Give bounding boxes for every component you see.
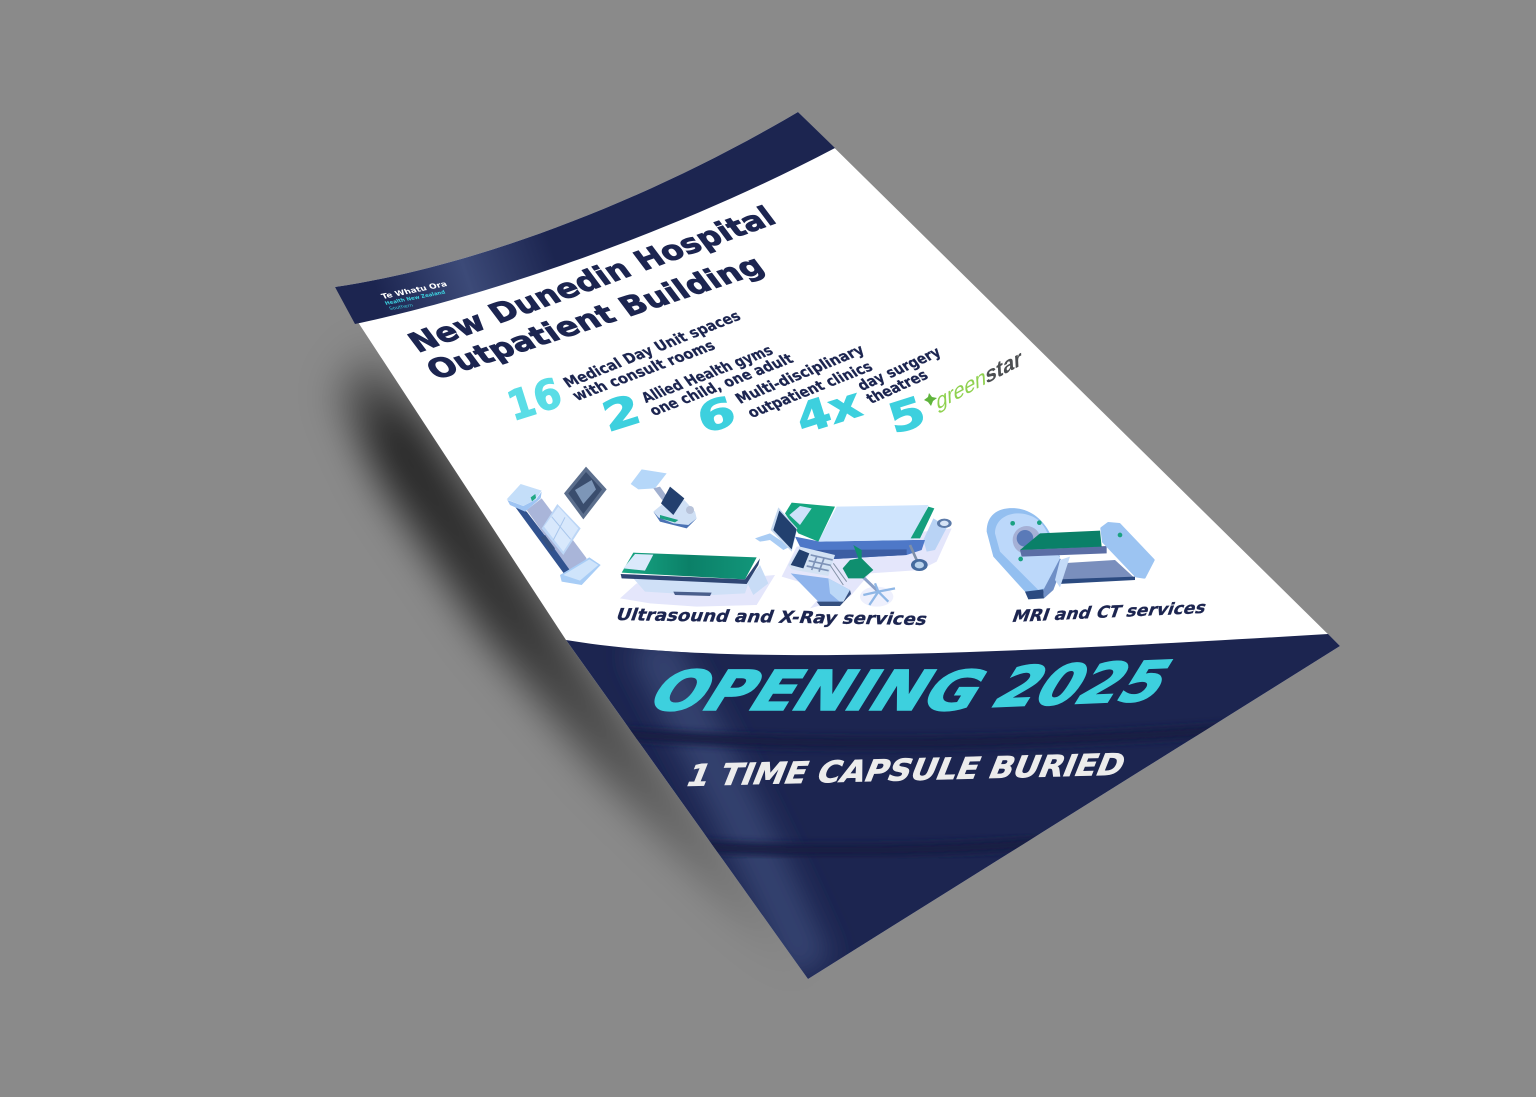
stat: 5 green star: 5 bbox=[883, 387, 931, 444]
stat: 4x day surgery theatres bbox=[791, 343, 945, 444]
stat: 4x day surgery theatres: day surgery bbox=[854, 343, 945, 394]
stat: 6 outpatient clinics: Multi-disciplinary bbox=[732, 341, 868, 407]
indicator dots bbox=[1010, 520, 1122, 561]
illustration: bed, ultrasound cart and chair bbox=[755, 503, 952, 608]
poster mockup scene bbox=[324, 112, 1340, 979]
stat: 6 outpatient clinics: outpatient clinics bbox=[744, 358, 876, 421]
caption: MRI and CT: MRI and CT services bbox=[1009, 598, 1209, 627]
stat: 16 medical day units: with consult rooms bbox=[569, 337, 719, 404]
stat: 2 allied health gyms: Allied Health gyms bbox=[638, 342, 777, 406]
logo: Te Whatu Ora: Southern bbox=[388, 303, 414, 312]
icon: operator chair bbox=[843, 545, 895, 607]
headline: opening 2025: OPENING bbox=[635, 660, 1000, 724]
lower navy band bbox=[566, 634, 1340, 979]
stat: 5 green star: star bbox=[985, 344, 1022, 389]
logo: Te Whatu Ora: Health New Zealand bbox=[384, 290, 447, 307]
stat: 16 medical day units bbox=[502, 307, 744, 431]
icon: ultrasound cart bbox=[788, 547, 851, 606]
poster sheet bbox=[335, 112, 1360, 990]
patient table bbox=[1020, 546, 1107, 557]
stat: 6 outpatient clinics bbox=[692, 341, 876, 444]
icon: ceiling x-ray arm bbox=[631, 469, 697, 528]
caption: ultrasound and x-ray: Ultrasound and X-Ray services bbox=[613, 605, 930, 630]
stat: 2 allied health gyms: 2 bbox=[597, 385, 646, 442]
end pod bbox=[1102, 523, 1153, 577]
illustration: MRI and CT scanner bbox=[987, 508, 1153, 599]
floor shadows bbox=[782, 528, 952, 608]
stat: 16 medical day units: Medical Day Unit spaces bbox=[560, 307, 744, 391]
icon: x-ray image panel bbox=[564, 467, 607, 519]
subheadline: time capsule: 1 TIME CAPSULE BURIED bbox=[681, 748, 1131, 794]
stat: 16 medical day units: 16 bbox=[502, 369, 567, 431]
title: New Dunedin Hospital bbox=[402, 201, 783, 359]
stat: 4x day surgery theatres: theatres bbox=[863, 366, 932, 407]
stat: 5 green star bbox=[883, 344, 1022, 444]
sheet drop shadow bbox=[335, 345, 806, 975]
stat: 2 allied health gyms: one child, one adult bbox=[646, 350, 797, 419]
logo: Te Whatu Ora: Te Whatu Ora bbox=[380, 280, 449, 301]
logo: Te Whatu Ora bbox=[380, 280, 449, 312]
top navy band bbox=[335, 112, 835, 324]
stat: 5 green star: green bbox=[936, 363, 987, 415]
stat: 4x day surgery theatres: 4x bbox=[791, 378, 867, 444]
icon: upright x-ray stand bbox=[507, 484, 601, 585]
legs panel bbox=[1058, 560, 1135, 580]
stat: 6 outpatient clinics: 6 bbox=[692, 387, 741, 444]
icon: green star bbox=[924, 393, 937, 406]
title: Outpatient Building bbox=[420, 250, 771, 386]
illustration: x-ray table bbox=[620, 553, 775, 607]
icon: patient bed bbox=[755, 503, 952, 571]
gantry bbox=[987, 508, 1060, 598]
stat: 2 allied health gyms bbox=[597, 342, 797, 442]
headline: opening 2025 bbox=[635, 649, 1186, 724]
headline: opening 2025: 2025 bbox=[979, 649, 1186, 721]
white page bbox=[335, 112, 1340, 979]
illustration: x-ray stand and C-arm bbox=[507, 467, 697, 585]
